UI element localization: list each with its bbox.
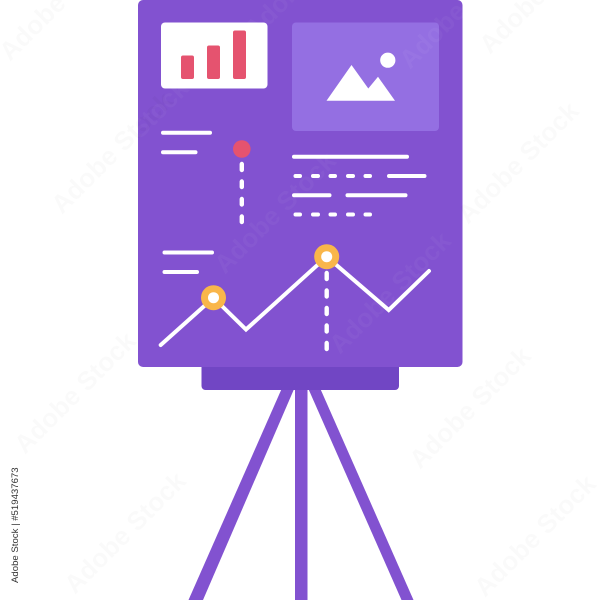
watermarks on white: Adobe Stock <box>403 340 537 474</box>
icon: sun <box>380 53 395 68</box>
watermarks on board: Stock <box>123 73 195 144</box>
data point marker two <box>314 244 339 269</box>
bar chart bars <box>181 30 246 79</box>
line chart <box>161 244 429 349</box>
watermarks on white: Adobe Stock <box>451 95 585 229</box>
watermarks on white: Adobe Stock <box>45 85 179 219</box>
dashed drop line <box>325 273 329 349</box>
watermarks on white: Adobe Stock <box>58 465 192 599</box>
watermarks on board: Adobe Stock <box>323 225 457 359</box>
board panel <box>138 0 462 367</box>
chart line <box>161 257 429 345</box>
watermarks on white: Adobe Stock <box>8 325 142 459</box>
white card with bar chart <box>161 22 268 88</box>
icon: mountains <box>326 65 395 101</box>
watermarks on board <box>123 0 471 359</box>
credit text: Adobe Stock | #519437673 <box>10 467 21 583</box>
watermarks on board: Adobe Stock <box>208 145 342 279</box>
text lines right column <box>294 157 424 214</box>
text lines lower left <box>164 252 212 272</box>
image placeholder panel <box>292 22 439 131</box>
text lines top left <box>163 133 210 152</box>
stand bracket <box>202 350 399 390</box>
data point marker one <box>201 285 226 310</box>
red marker with dashed line <box>233 140 251 222</box>
tripod stand legs <box>188 388 414 600</box>
watermarks on white: Adobe Stock <box>468 468 600 600</box>
